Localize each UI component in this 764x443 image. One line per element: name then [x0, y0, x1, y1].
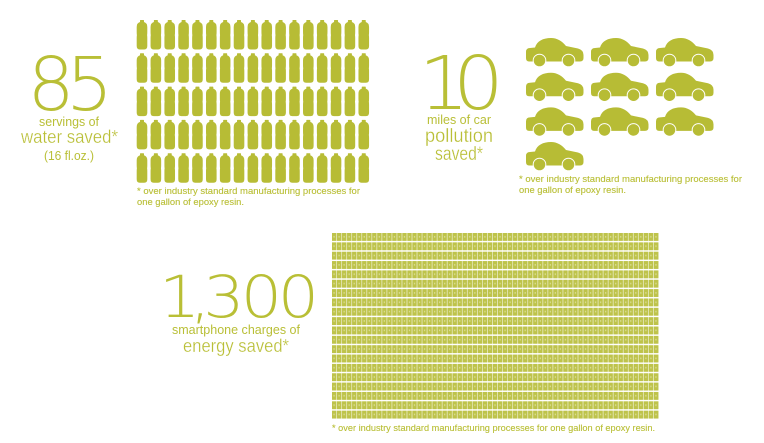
- label: energy saved: energy saved*: [183, 336, 289, 356]
- icon grid: 1300 smartphones: [332, 233, 659, 420]
- panel: water saved: [20, 20, 369, 207]
- panel: car pollution saved: [419, 38, 742, 195]
- icon grid: 10 cars: [526, 38, 714, 171]
- label: servings of: servings of: [39, 114, 99, 129]
- label: smartphone charges of: smartphone charges of: [172, 322, 300, 337]
- footnote: cars: * over industry standard manufacturing processes for: [519, 174, 742, 184]
- icon grid: 85 bottles: [137, 20, 369, 183]
- label: saved: saved*: [435, 144, 483, 165]
- footnote: cars: one gallon of epoxy resin.: [519, 185, 626, 195]
- label: 16 fl oz: (16 fl.oz.): [44, 148, 94, 163]
- stat: 10: 10: [419, 42, 504, 127]
- label: pollution: pollution: [425, 126, 493, 147]
- stat: 1,300: 1,300: [159, 263, 319, 331]
- label: water saved: water saved*: [20, 127, 118, 147]
- footnote: water: * over industry standard manufacturing processes for: [137, 186, 360, 196]
- footnote: energy: * over industry standard manufacturing processes for one gallon of epoxy resin.: [332, 423, 655, 433]
- stat: 85: 85: [28, 42, 113, 128]
- label: miles of car: miles of car: [427, 112, 492, 127]
- footnote: water: one gallon of epoxy resin.: [137, 197, 244, 207]
- panel: energy saved: [159, 233, 659, 433]
